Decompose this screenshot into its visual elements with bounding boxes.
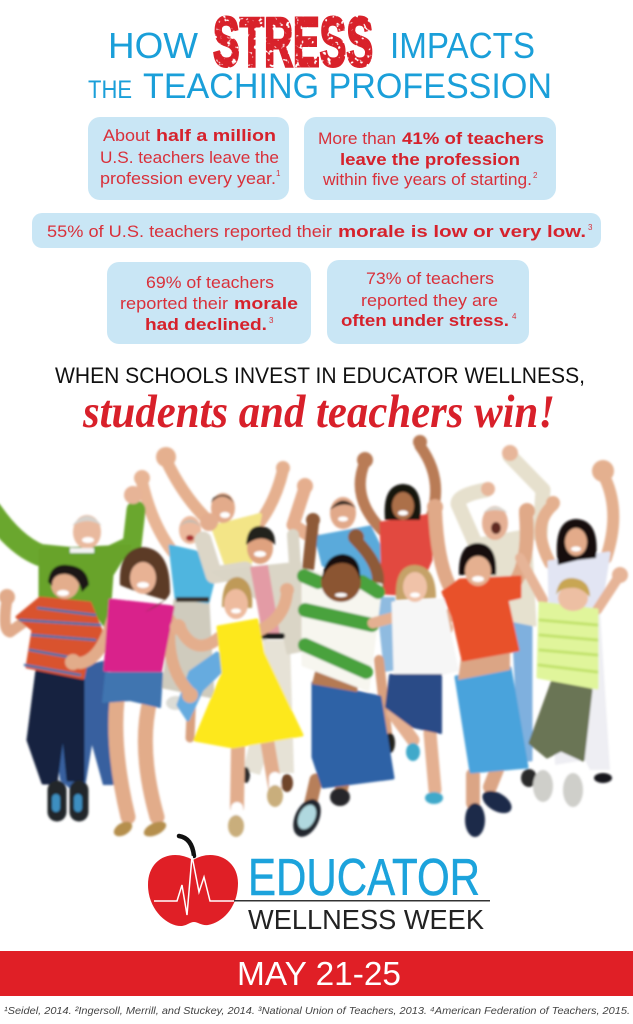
person: girl in yellow dress <box>170 577 302 837</box>
stat box: morale low: 55% of U.S. teachers reported their <box>47 222 332 241</box>
person: girl in white top <box>373 565 457 804</box>
stat box: half a million: profession every year. <box>100 169 276 188</box>
footnotes: ¹Seidel, 2014. ²Ingersoll, Merrill, and Stuckey, 2014. ³National Union of Teachers, 2013. ⁴American Federation of Teachers, 2015. <box>4 1005 630 1017</box>
stat box: morale declined: 3 <box>269 316 274 325</box>
logo words: wellness week: WELLNESS WEEK <box>248 904 484 935</box>
stat box: 41 percent: within five years of starting. <box>322 170 532 189</box>
stat box: under stress: often under stress. <box>341 311 509 330</box>
person: woman in white <box>541 460 614 783</box>
date banner <box>0 951 633 996</box>
stat box: half a million: half a million <box>156 126 276 145</box>
stat box: half a million <box>88 117 289 200</box>
logo word: educator: EDUCATOR <box>248 849 480 907</box>
person: man in blue shirt <box>293 478 385 585</box>
logo: educator wellness week <box>148 836 490 935</box>
title <box>88 3 552 106</box>
icon: apple with heartbeat <box>148 836 238 926</box>
stat box: morale declined <box>107 262 311 344</box>
stat box: half a million: 1 <box>276 169 281 178</box>
person: man in beige suit <box>178 513 303 792</box>
stat box: 41 percent: More than <box>318 129 396 148</box>
person: boy in green striped shirt <box>288 513 393 841</box>
stat box: half a million: About <box>103 126 150 145</box>
stat box: morale low: 3 <box>588 223 593 232</box>
person: boy in striped red shirt <box>0 565 105 812</box>
date banner: MAY 21-25 <box>237 955 401 992</box>
title: TEACHING PROFESSION <box>143 67 552 106</box>
person: girl in pink top <box>65 547 198 840</box>
title word: stress: STRESS <box>213 3 373 81</box>
photo: jumping students and teachers <box>0 435 628 841</box>
stat box: morale declined: reported their <box>120 294 228 313</box>
person: older man in green sweater <box>0 486 142 800</box>
stat box: morale low <box>32 213 601 248</box>
stat box: under stress: 4 <box>512 312 517 321</box>
person: woman in red top <box>357 435 436 753</box>
person: boy in orange shirt <box>427 499 535 837</box>
person: blond boy in lime shirt <box>520 558 628 807</box>
person: woman in blue top <box>134 470 216 738</box>
headline: students and teachers win: students and teachers win! <box>82 386 555 438</box>
stat box: morale declined: morale <box>234 294 298 313</box>
stat box: 41 percent: 2 <box>533 171 538 180</box>
stat box: 41 percent: leave the profession <box>340 150 520 169</box>
title: HOW <box>108 25 198 66</box>
subheading: WHEN SCHOOLS INVEST IN EDUCATOR WELLNESS, <box>55 363 585 388</box>
stat box: under stress <box>327 260 529 344</box>
stat box: under stress: reported they are <box>361 291 498 310</box>
stat box: under stress: 73% of teachers <box>366 269 494 288</box>
person: man in yellow shirt <box>156 447 290 567</box>
stat box: 41 percent: 41% of teachers <box>402 129 544 148</box>
stat box: half a million: U.S. teachers leave the <box>100 148 279 167</box>
stat box: morale declined: had declined. <box>145 315 267 334</box>
stat box: morale low: morale is low or very low. <box>338 222 586 241</box>
title: THE <box>88 76 132 104</box>
stat box: morale declined: 69% of teachers <box>146 273 274 292</box>
title: IMPACTS <box>390 25 535 66</box>
stat box: 41 percent <box>304 117 556 200</box>
person: older man in cream sweater <box>458 445 543 787</box>
